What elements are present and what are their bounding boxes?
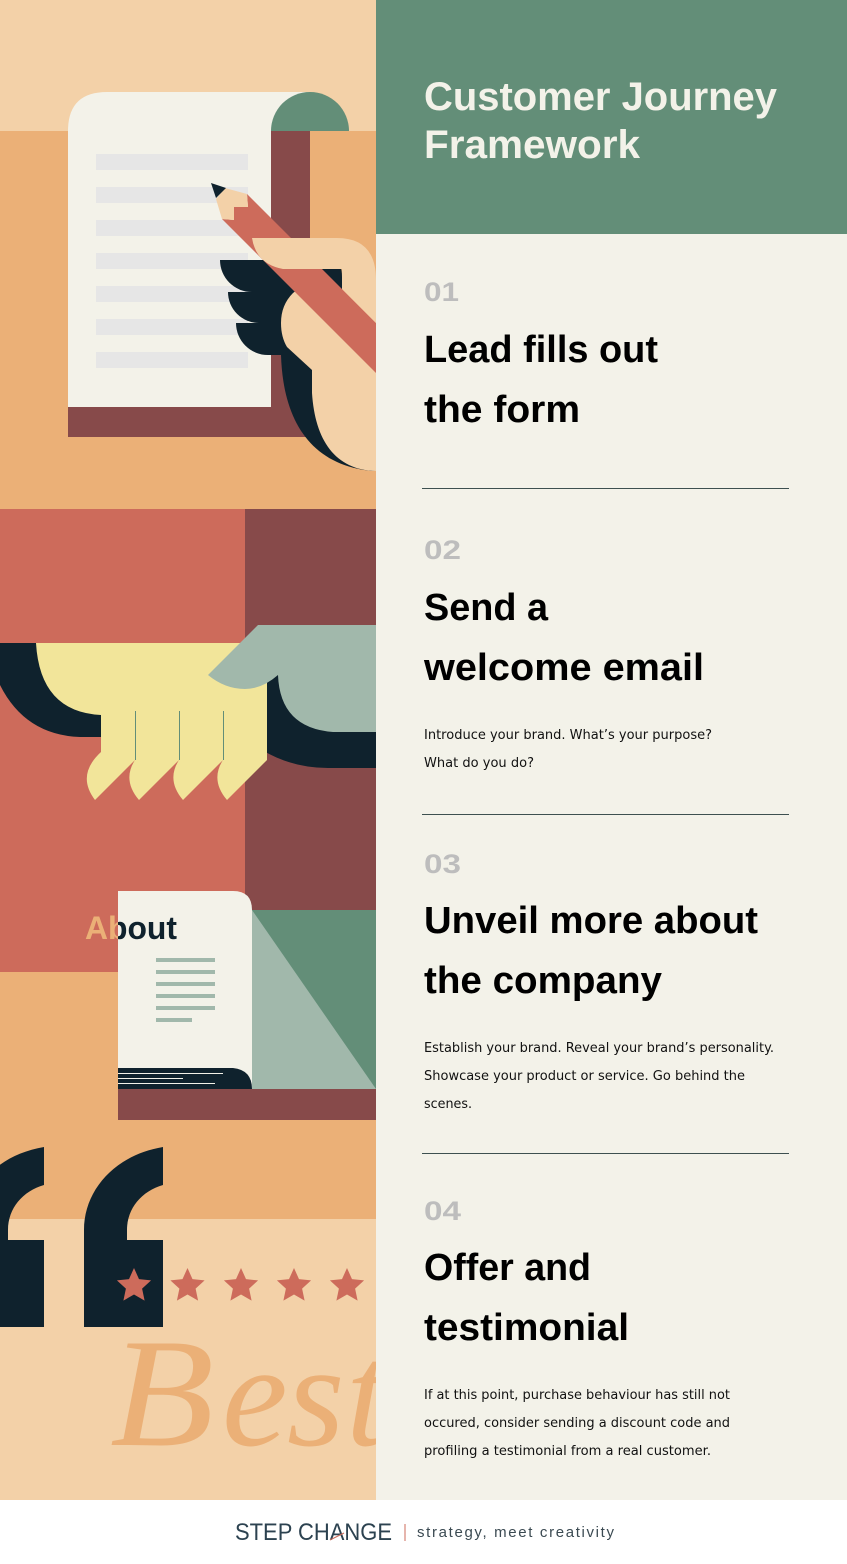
light wedge (252, 910, 376, 1089)
book text lines (156, 958, 215, 1022)
spine lines (118, 1073, 223, 1084)
tagline: strategy, meet creativity (417, 1524, 614, 1541)
left sleeve (0, 643, 101, 737)
hand shadow and fingers (220, 260, 376, 471)
icon: testimonial quote marks (0, 1147, 163, 1327)
icon: handshake (0, 625, 376, 800)
step body: If at this point, purchase behaviour has still not (424, 1387, 730, 1403)
step 03 (424, 849, 774, 1112)
sage hand (208, 625, 376, 732)
header panel (376, 0, 847, 234)
about word, navy part: About (85, 910, 177, 946)
step body: What do you do? (424, 755, 534, 771)
step number: 01 (424, 277, 459, 307)
step number: 04 (424, 1196, 461, 1226)
step body: Showcase your product or service. Go behind the (424, 1068, 745, 1084)
footer (0, 1500, 847, 1564)
step body: profiling a testimonial from a real customer. (424, 1443, 711, 1459)
green backdrop (252, 910, 376, 1089)
separator (404, 1524, 406, 1541)
pencil (211, 183, 376, 373)
step heading (424, 329, 658, 431)
step body (424, 1040, 774, 1112)
form lines (96, 154, 248, 368)
form paper (68, 92, 310, 407)
step 01 (424, 277, 658, 431)
panel: illustration background (0, 0, 376, 1500)
decorative word: Best: B (110, 1308, 214, 1479)
icon: writing hand with form (68, 92, 376, 471)
book base (118, 1089, 376, 1120)
form backing board (68, 131, 310, 437)
book spine (118, 1068, 252, 1089)
paper curl (271, 92, 349, 131)
step 02 (423, 535, 712, 771)
right sleeve (262, 675, 376, 768)
step heading: Unveil more about (424, 900, 758, 942)
icon: about book (85, 891, 376, 1120)
step heading (424, 1247, 629, 1349)
step heading: Send a (424, 587, 549, 629)
title: Customer Journey (424, 75, 778, 119)
step heading (424, 900, 758, 1002)
step body (424, 727, 712, 771)
yellow hand (36, 643, 267, 800)
step heading: the form (424, 389, 580, 431)
title (424, 75, 778, 167)
step number: 03 (424, 849, 461, 879)
step heading: testimonial (424, 1307, 629, 1349)
thumb (252, 238, 376, 323)
step body: Establish your brand. Reveal your brand’s personality. (424, 1040, 774, 1056)
logo accent (330, 1533, 344, 1540)
step heading: Lead fills out (424, 329, 658, 371)
book cover (118, 891, 252, 1089)
logo wordmark: STEP CHANGE (235, 1519, 392, 1546)
step heading: the company (424, 960, 662, 1002)
step body: scenes. (424, 1096, 472, 1112)
title: Framework (424, 123, 641, 167)
finger separators (136, 711, 224, 760)
about word, orange part: About (85, 910, 177, 946)
step 04 (424, 1196, 730, 1459)
step heading: welcome email (423, 647, 704, 689)
star rating (117, 1268, 364, 1301)
decorative word: Best (112, 1344, 376, 1446)
step heading (423, 587, 704, 689)
step number: 02 (424, 535, 461, 565)
hand (281, 280, 376, 471)
step heading: Offer and (424, 1247, 591, 1289)
step body (424, 1387, 730, 1459)
decorative word: Best: est (222, 1314, 391, 1478)
step body: occured, consider sending a discount code and (424, 1415, 730, 1431)
step body: Introduce your brand. What’s your purpose? (424, 727, 712, 743)
panel: steps background (376, 234, 847, 1500)
